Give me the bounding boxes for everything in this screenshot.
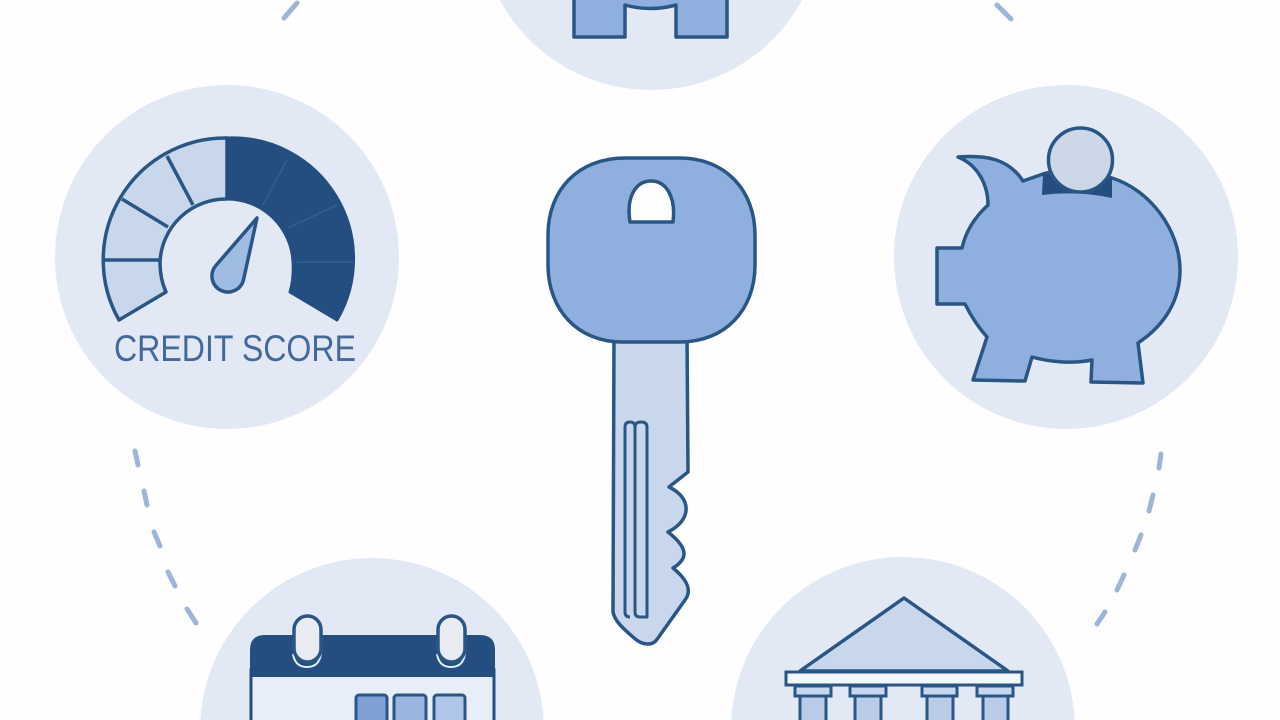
icon: calendar page bbox=[251, 670, 494, 720]
dashed connector: lower right bbox=[1097, 454, 1161, 624]
label: credit score: CREDIT SCORE bbox=[114, 328, 356, 369]
panel: piggy bank bbox=[894, 85, 1238, 429]
panel: central key bbox=[548, 158, 755, 644]
key blade grooves bbox=[625, 422, 647, 617]
icon: pig body bbox=[937, 156, 1180, 383]
key head with hole bbox=[548, 158, 755, 342]
icon: gauge light segments bbox=[103, 138, 227, 320]
panel: credit score bbox=[55, 85, 399, 429]
background circle: credit score bbox=[55, 85, 399, 429]
icon: calendar date squares bbox=[356, 695, 465, 720]
panel: top house (cropped) bbox=[479, 0, 823, 90]
background circle: house bbox=[479, 0, 823, 90]
icon: right binder ring bbox=[437, 616, 465, 667]
icon: coin bbox=[1048, 128, 1112, 192]
icon: house base bbox=[574, 0, 727, 37]
icon: left binder ring bbox=[293, 616, 321, 667]
panel: calendar bbox=[200, 558, 544, 720]
key blade bbox=[613, 335, 688, 644]
icon: bank columns bbox=[795, 686, 1013, 720]
icon: coin slot bbox=[1042, 174, 1112, 198]
background circle: piggy bank bbox=[894, 85, 1238, 429]
icon: gauge needle bbox=[212, 218, 257, 292]
background circle: calendar bbox=[200, 558, 544, 720]
dashed connector: lower left bbox=[135, 451, 196, 623]
icon: calendar header bbox=[250, 635, 495, 677]
panel: bank bbox=[731, 557, 1075, 720]
dashed connector: top right bbox=[997, 5, 1011, 19]
icon: gauge dark segments bbox=[227, 138, 354, 320]
dashed connector: top left bbox=[284, 3, 297, 18]
icon: bank roof bbox=[800, 598, 1008, 671]
icon: bank entablature bbox=[786, 672, 1022, 685]
background circle: bank bbox=[731, 557, 1075, 720]
